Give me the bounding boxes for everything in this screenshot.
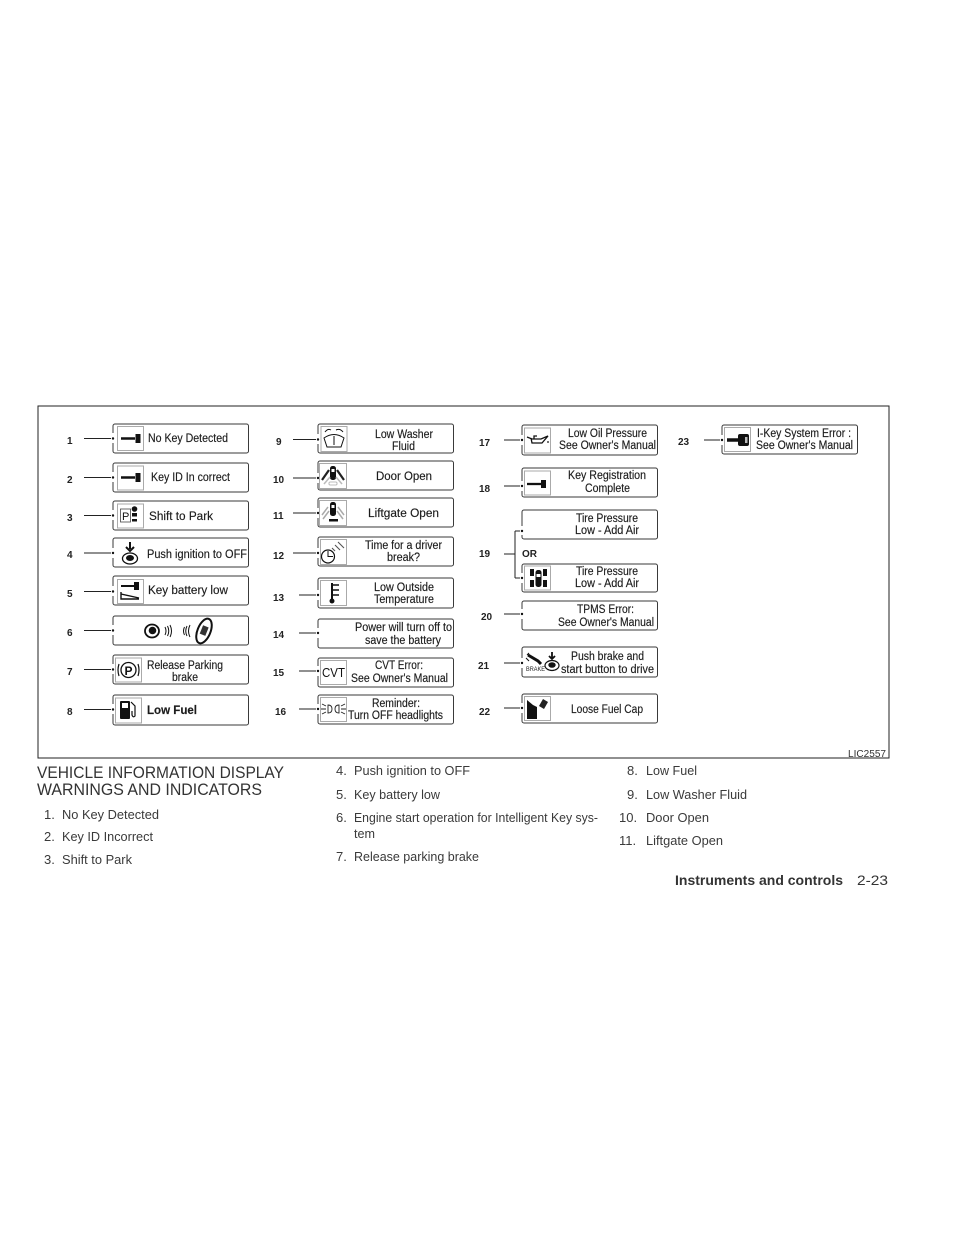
item 8: Low Fuel: Low Fuel [147,705,197,717]
item 22: Loose Fuel Cap [479,694,658,723]
item 4: Push ignition to OFF: Push ignition to OFF [147,549,247,561]
list column 3: Door Open [646,810,709,825]
list column 3: Liftgate Open [646,833,723,848]
item 8: Low Fuel [67,695,248,725]
list column 1: Key ID Incorrect [62,829,153,844]
item 19: Tire Pressure Low two variants: 19 [479,549,491,560]
heading: WARNINGS AND INDICATORS [37,780,262,799]
item 22: Loose Fuel Cap: Loose Fuel Cap [571,704,643,716]
list column 2: 5. [336,787,347,802]
item 16: Reminder headlights [275,695,454,724]
item 3: Shift to Park: P [122,511,129,523]
list column 1: Shift to Park [62,852,132,867]
item 20: TPMS Error: See Owner's Manual [558,617,654,629]
item 12: Time for a driver break?: Time for a driver [365,540,442,552]
item 8: Low Fuel: 8 [67,707,73,718]
item 13: Low Outside Temperature: 13 [273,593,285,604]
item 21: Push brake and start button: BRAKE [526,666,546,673]
page footer: 2-23 [857,872,888,888]
item 14: Power will turn off: save the battery [365,635,441,647]
item 18: Key Registration Complete: Complete [585,483,630,495]
item 14: Power will turn off [273,619,454,648]
item 1: No Key Detected [67,424,248,453]
item 11: Liftgate Open: 11 [273,511,284,522]
figure code: LIC2557 [848,749,886,760]
item 6: engine start operation icons: 6 [67,628,73,639]
item 20: TPMS Error: TPMS Error: [577,604,634,616]
figure frame [38,406,889,758]
item 18: Key Registration Complete [479,468,658,497]
item 7: Release Parking brake: brake [172,672,198,684]
item 5: Key battery low [67,576,248,605]
item 11: Liftgate Open [273,498,454,527]
item 4: Push ignition to OFF: 4 [67,550,73,561]
item 21: Push brake and start button: start button to drive [561,664,654,676]
item 20: TPMS Error [481,601,658,630]
item 14: Power will turn off: 14 [273,630,285,641]
list column 3: 11. [619,833,636,848]
list column 1: 3. [44,852,55,867]
item 15: CVT Error: CVT [322,665,345,680]
item 16: Reminder headlights: 16 [275,707,287,718]
item 22: Loose Fuel Cap: 22 [479,707,491,718]
item 7: Release Parking brake: 7 [67,667,73,678]
item 21: Push brake and start button: 21 [478,661,490,672]
item 6: engine start operation icons [67,616,248,645]
item 17: Low Oil Pressure: Low Oil Pressure [568,428,647,440]
heading: VEHICLE INFORMATION DISPLAY [37,763,284,782]
item 23: I-Key System Error: I-Key System Error : [757,428,851,440]
item 3: Shift to Park: 3 [67,513,73,524]
item 14: Power will turn off: Power will turn off to [355,622,452,634]
item 12: Time for a driver break? [273,537,454,566]
item 13: Low Outside Temperature: Low Outside [374,582,434,594]
list column 2: 7. [336,849,347,864]
item 20: TPMS Error: 20 [481,612,493,623]
item 3: Shift to Park [67,501,248,530]
item 7: Release Parking brake: Release Parking [147,660,223,672]
item 19: Tire Pressure Low two variants: OR [522,549,538,560]
item 18: Key Registration Complete: 18 [479,484,491,495]
list column 3: 10. [619,810,637,825]
item 11: Liftgate Open: Liftgate Open [368,508,439,520]
item 7: Release Parking brake: P [124,664,133,678]
item 1: No Key Detected: 1 [67,436,73,447]
item 19: Tire Pressure Low two variants [479,510,658,592]
item 19: Tire Pressure Low two variants: Tire Pressure [576,566,638,578]
item 19: Tire Pressure Low two variants: Tire Pressure [576,513,638,525]
item 9: Low Washer Fluid [276,424,454,453]
list column 3: Low Washer Fluid [646,787,747,802]
item 15: CVT Error: 15 [273,668,285,679]
list column 2: tem [354,826,375,841]
item 2: Key ID Incorrect [67,463,248,492]
list column 2 [336,763,598,864]
item 23: I-Key System Error: 23 [678,437,690,448]
heading [37,763,284,799]
list column 1: No Key Detected [62,807,159,822]
item 12: Time for a driver break?: break? [387,552,420,564]
list column 1: 2. [44,829,55,844]
list column 1: 1. [44,807,55,822]
list column 3: Low Fuel [646,763,697,778]
item 23: I-Key System Error [678,425,858,454]
item 15: CVT Error [273,658,454,687]
item 9: Low Washer Fluid: Low Washer [375,429,433,441]
item 19: Tire Pressure Low two variants: Low - Add Air [575,525,639,537]
list column 3: 8. [627,763,638,778]
item 5: Key battery low: Key battery low [148,585,229,597]
list column 2: 6. [336,810,347,825]
item 1: No Key Detected: No Key Detected [148,433,228,445]
item 16: Reminder headlights: Reminder: [372,698,420,710]
item 18: Key Registration Complete: Key Registration [568,470,646,482]
item 13: Low Outside Temperature [273,578,454,608]
item 4: Push ignition to OFF [67,538,248,567]
item 12: Time for a driver break?: 12 [273,551,285,562]
item 2: Key ID Incorrect: Key ID In correct [151,472,231,484]
item 3: Shift to Park: Shift to Park [149,511,213,523]
item 5: Key battery low: 5 [67,589,73,600]
list column 2: Push ignition to OFF [354,763,470,778]
item 9: Low Washer Fluid: 9 [276,437,282,448]
item 2: Key ID Incorrect: 2 [67,475,73,486]
item 13: Low Outside Temperature: Temperature [374,594,434,606]
list column 2: Release parking brake [354,849,479,864]
item 17: Low Oil Pressure: 17 [479,438,491,449]
item 10: Door Open [273,461,454,490]
list column 3 [619,763,747,848]
item 23: I-Key System Error: See Owner's Manual [756,440,853,452]
item 7: Release Parking brake [67,655,248,684]
item 21: Push brake and start button [478,647,658,677]
item 15: CVT Error: See Owner's Manual [351,673,448,685]
item 10: Door Open: Door Open [376,471,432,483]
item 10: Door Open: 10 [273,475,285,486]
page footer: Instruments and controls [675,873,843,888]
item 17: Low Oil Pressure [479,425,658,455]
list column 2: Engine start operation for Intelligent Key sys- [354,810,598,825]
item 16: Reminder headlights: Turn OFF headlights [348,710,443,722]
item 9: Low Washer Fluid: Fluid [392,441,415,453]
list column 2: Key battery low [354,787,441,802]
list column 2: 4. [336,763,347,778]
item 19: Tire Pressure Low two variants: Low - Add Air [575,578,639,590]
list column 1 [44,807,159,867]
list column 3: 9. [627,787,638,802]
item 21: Push brake and start button: Push brake and [571,651,644,663]
item 15: CVT Error: CVT Error: [375,660,423,672]
item 17: Low Oil Pressure: See Owner's Manual [559,440,656,452]
